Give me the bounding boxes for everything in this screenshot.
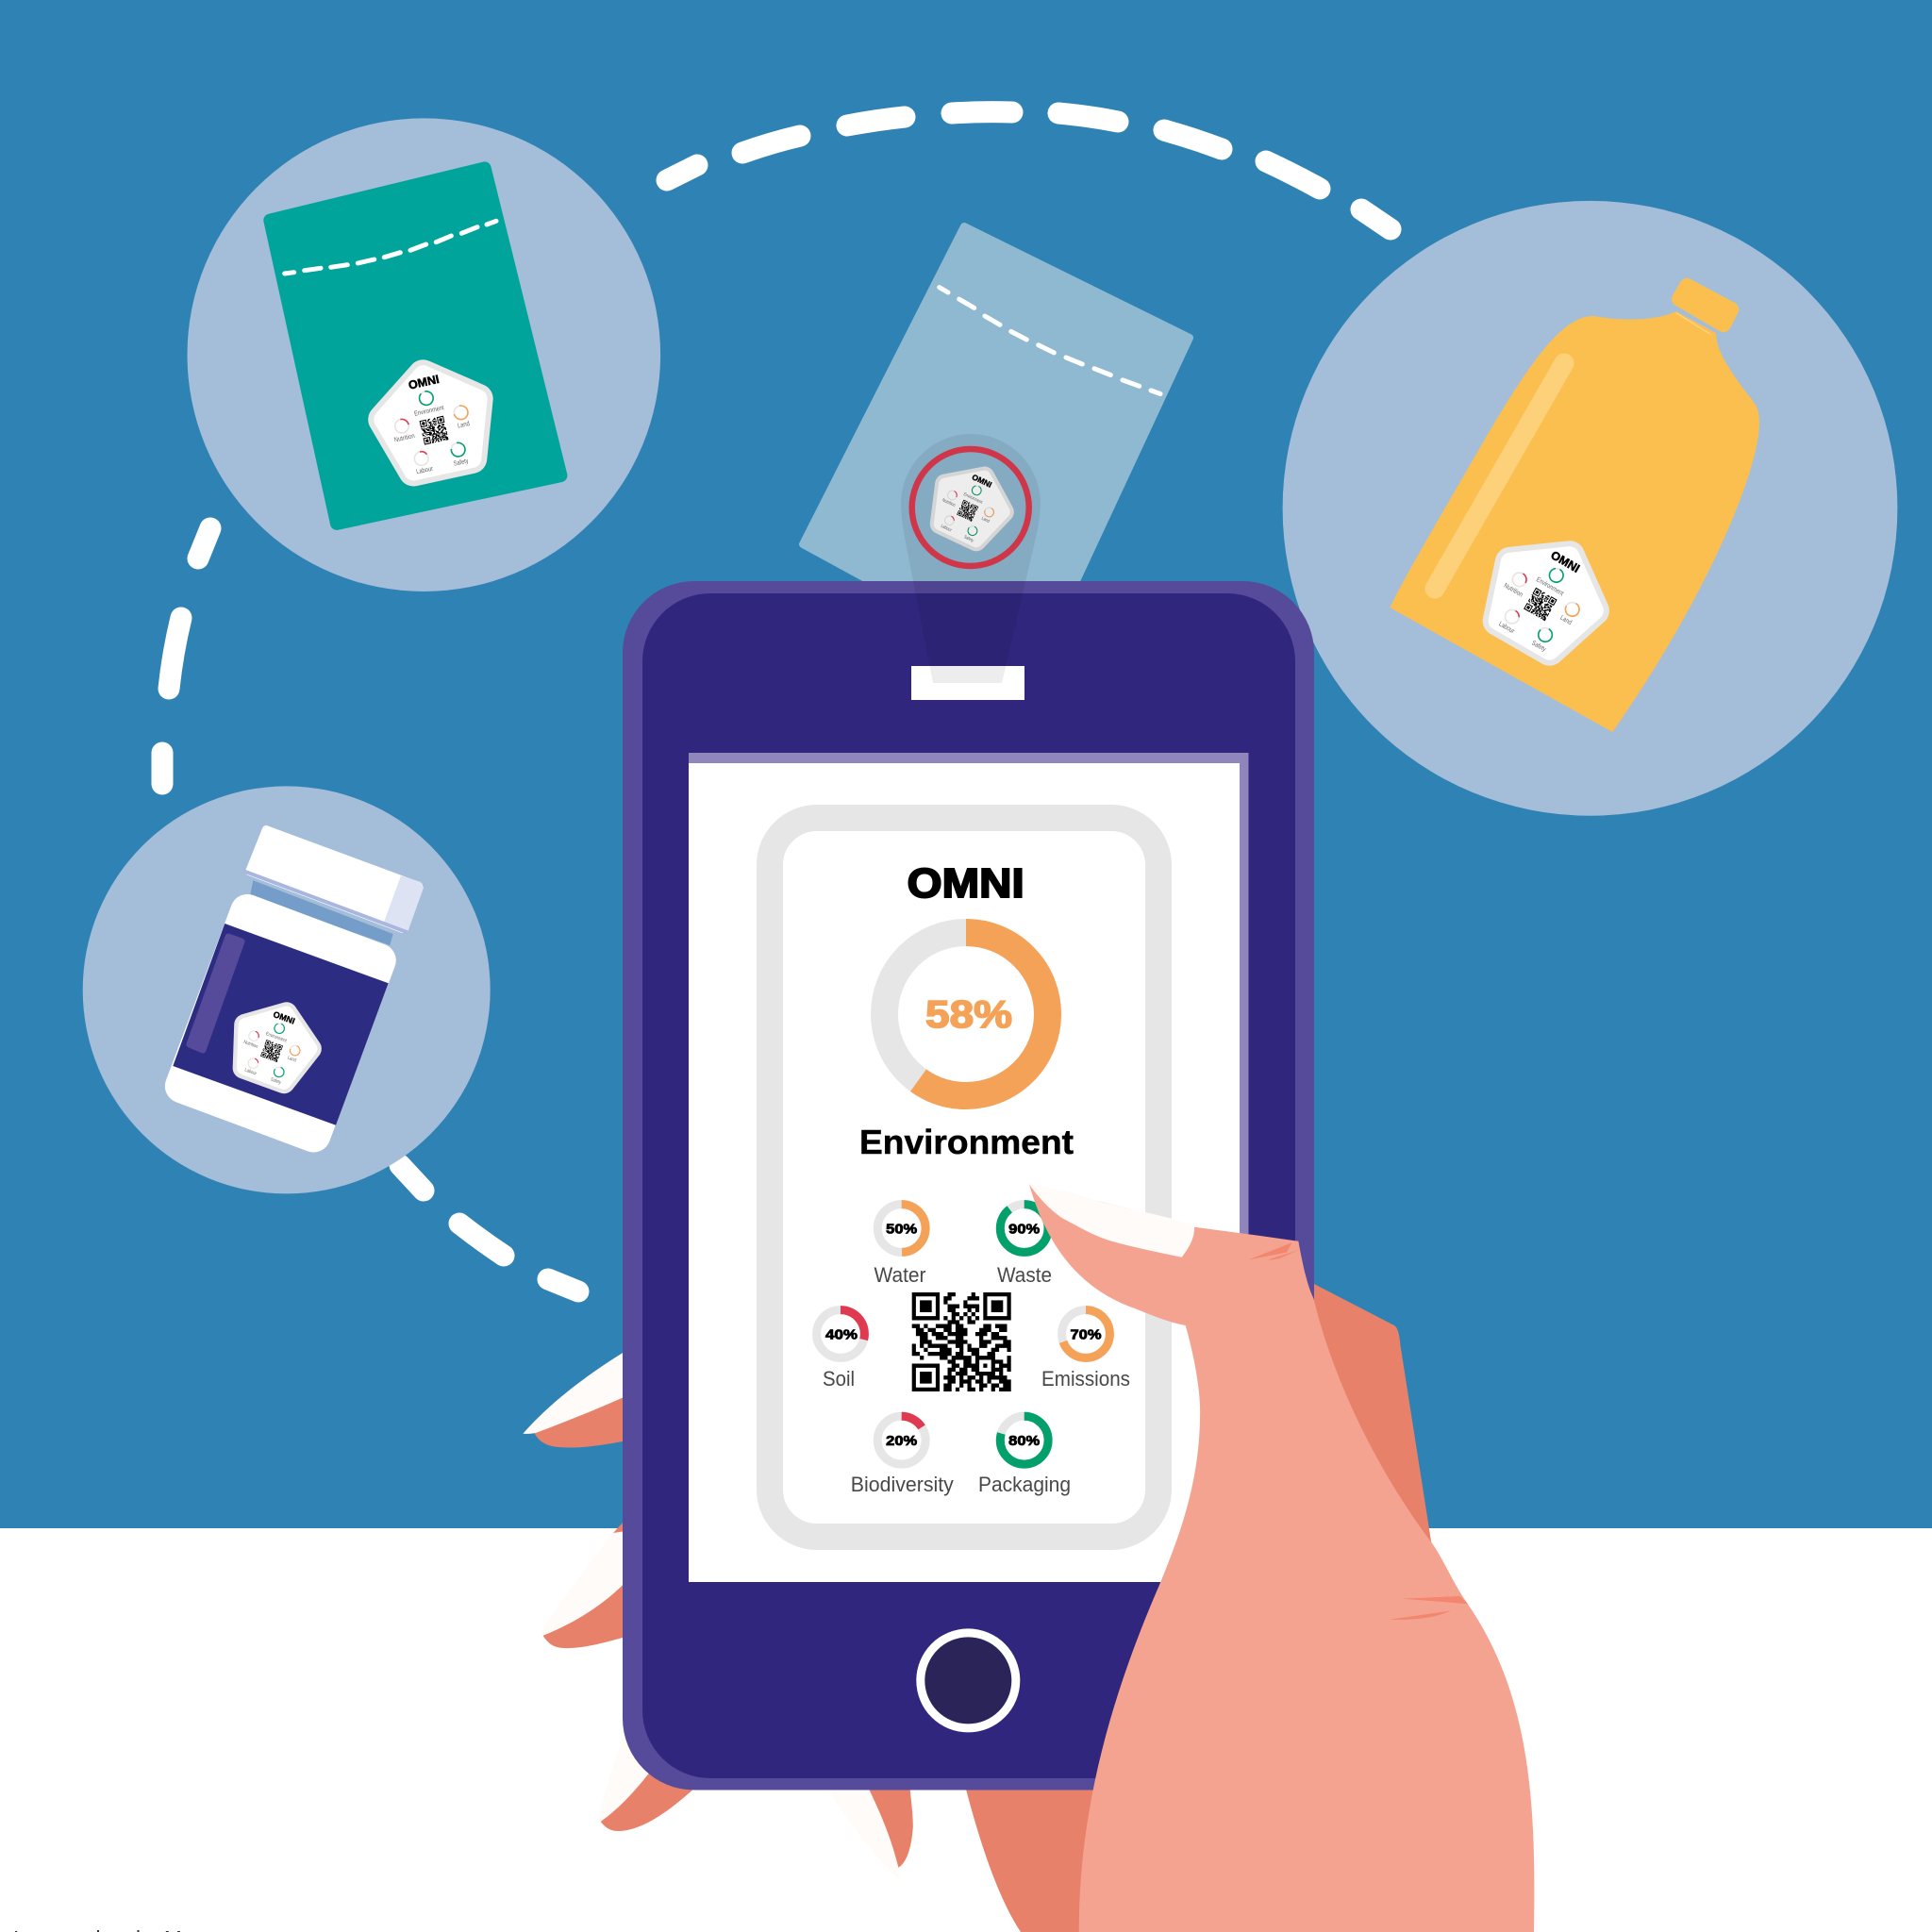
hand holding phone <box>1029 1185 1534 1932</box>
sticker: teal pouch: OMNI <box>408 373 441 392</box>
58 percent value: 58% <box>925 992 1012 1036</box>
sticker: pill bottle: Safety <box>270 1076 282 1086</box>
panel: teal pouch circle <box>187 118 660 591</box>
screen frame <box>689 753 1249 1582</box>
sticker: teal pouch: Safety <box>453 456 470 468</box>
gauge: Packaging <box>978 1416 1071 1496</box>
gauge: Soil: 40% <box>825 1326 858 1343</box>
knuckle crease upper <box>1249 1242 1292 1259</box>
pouch tear line <box>285 221 496 274</box>
phone face <box>642 593 1295 1778</box>
gauge: Packaging: 80% <box>1008 1433 1040 1449</box>
finger 2 <box>540 1521 632 1648</box>
bottle highlight <box>1435 363 1564 589</box>
gauge: Packaging: Packaging <box>978 1473 1071 1496</box>
sticker: scanned pouch: Labour <box>940 524 953 533</box>
gauge: Emissions: 70% <box>1070 1326 1102 1343</box>
sticker: scanned pouch: OMNI <box>971 472 993 490</box>
blue background <box>0 0 1932 1528</box>
thumb and palm <box>1029 1185 1534 1932</box>
hand parts behind phone <box>523 1280 1432 1932</box>
wrist crease lower <box>1390 1611 1451 1620</box>
gauge: Biodiversity: Biodiversity <box>851 1473 954 1496</box>
finger 4 <box>824 1774 913 1880</box>
sticker: pill bottle: Land <box>287 1056 297 1063</box>
thumbnail <box>1029 1185 1194 1257</box>
gauge: Biodiversity <box>851 1416 954 1496</box>
sticker: scanned pouch: Safety <box>963 534 974 544</box>
knuckle crease lower <box>1268 1250 1299 1260</box>
yellow bottle body <box>1390 311 1759 732</box>
sticker: teal pouch <box>375 364 491 480</box>
gauge: Soil: Soil <box>823 1367 855 1391</box>
palm under phone <box>963 1778 1141 1932</box>
phone casing <box>623 581 1314 1790</box>
back of hand <box>1302 1280 1432 1547</box>
teal pouch <box>270 168 560 524</box>
label highlight <box>190 937 242 1050</box>
wrist crease upper <box>1402 1596 1468 1604</box>
sticker: scanned pouch: Nutrition <box>941 497 957 508</box>
Environment heading: Environment <box>859 1123 1074 1161</box>
finger 3 <box>598 1734 698 1831</box>
sticker: teal pouch: Labour <box>415 464 434 475</box>
QR code <box>912 1294 1011 1390</box>
gauge: Biodiversity: 20% <box>886 1433 917 1449</box>
gauge: Water: Water <box>874 1263 926 1287</box>
app card <box>770 818 1158 1537</box>
sticker: pill bottle: Labour <box>243 1067 258 1077</box>
sticker: scanned pouch <box>927 463 1014 550</box>
OMNI logo: OMNI <box>908 860 1024 907</box>
pill bottle cap <box>249 829 419 929</box>
sticker: yellow bottle: Safety <box>1530 639 1548 654</box>
gauge: Emissions: Emissions <box>1041 1367 1130 1391</box>
pill bottle neck <box>250 880 393 945</box>
finger 1 <box>523 1347 632 1448</box>
pill bottle label band <box>173 924 389 1125</box>
screen <box>689 763 1240 1582</box>
sticker: yellow bottle: Environment <box>1535 575 1565 597</box>
sticker: teal pouch: Environment <box>413 403 444 418</box>
sticker: scanned pouch: Environment <box>962 491 984 506</box>
phone <box>623 581 1314 1790</box>
scanned pouch tear line <box>940 288 1160 394</box>
pill bottle body <box>160 890 401 1158</box>
panel: scanned pale blue pouch <box>803 226 1190 585</box>
dashed journey path <box>162 112 1391 1291</box>
sticker: pill bottle: Environment <box>265 1031 288 1044</box>
gauge: Waste <box>997 1205 1052 1287</box>
sticker: teal pouch: Nutrition <box>393 431 415 444</box>
sticker: pill bottle: Nutrition <box>242 1040 258 1050</box>
gauge: Emissions <box>1041 1310 1130 1391</box>
sticker: pill bottle: OMNI <box>272 1009 296 1026</box>
main donut chart <box>885 932 1047 1096</box>
gauge: Waste: Waste <box>997 1263 1052 1287</box>
gauge: Soil <box>817 1310 864 1391</box>
sticker: pill bottle <box>229 1001 319 1091</box>
sticker: yellow bottle: Land <box>1558 613 1574 626</box>
sticker: yellow bottle: OMNI <box>1548 548 1582 575</box>
scan target ring <box>912 449 1029 566</box>
sticker: yellow bottle: Labour <box>1497 619 1517 635</box>
panel: pill bottle circle <box>83 786 491 1193</box>
panel: yellow bottle circle <box>1283 201 1897 816</box>
sticker: yellow bottle: Nutrition <box>1503 581 1524 598</box>
sticker: teal pouch: Land <box>457 419 471 430</box>
scanner beam <box>901 434 1041 683</box>
home button <box>916 1628 1020 1732</box>
gauge: Water: 50% <box>886 1221 917 1238</box>
yellow bottle cap <box>1679 286 1731 325</box>
gauge: Water <box>874 1205 926 1287</box>
sticker: scanned pouch: Land <box>980 516 991 525</box>
gauge: Waste: 90% <box>1008 1221 1040 1238</box>
sticker: yellow bottle <box>1479 532 1612 664</box>
speaker <box>911 666 1024 700</box>
